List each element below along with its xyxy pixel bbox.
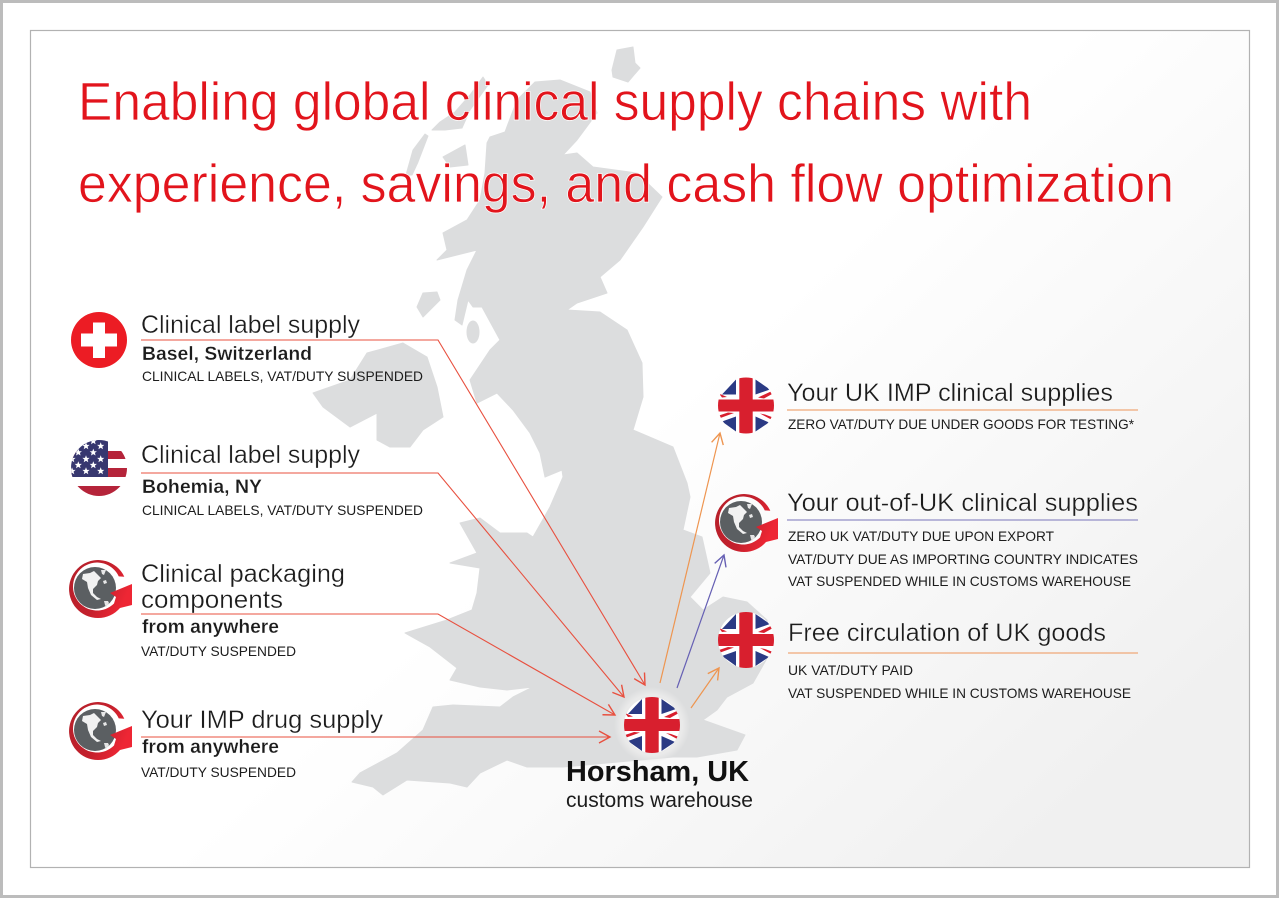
- arrow: Basel to Horsham: [141, 340, 645, 685]
- icon: US flag: [71, 440, 127, 496]
- icon: UK flag: [718, 378, 774, 434]
- title: [78, 72, 1174, 214]
- panel: Bohemia clinical label supply: [68, 437, 423, 518]
- location name: Horsham, UK: [566, 756, 749, 788]
- arrow: Horsham to UK IMP supplies: [660, 433, 720, 683]
- location: Basel, Switzerland: [142, 344, 312, 365]
- icon: globe with arrow: [69, 560, 132, 618]
- note: ZERO VAT/DUTY DUE UNDER GOODS FOR TESTING*: [788, 416, 1135, 432]
- panel: free circulation of UK goods: [718, 612, 1138, 701]
- note: CLINICAL LABELS, VAT/DUTY SUSPENDED: [142, 368, 423, 384]
- subtitle: customs warehouse: [566, 789, 753, 812]
- heading: [141, 560, 345, 614]
- notes: [788, 528, 1138, 589]
- panel: clinical packaging components: [69, 560, 345, 659]
- heading: Your UK IMP clinical supplies: [787, 379, 1113, 407]
- heading: components: [141, 586, 283, 614]
- heading: Your out-of-UK clinical supplies: [787, 489, 1138, 517]
- note: CLINICAL LABELS, VAT/DUTY SUSPENDED: [142, 502, 423, 518]
- icon: UK flag with halo: [614, 687, 690, 763]
- notes: UK VAT/DUTY PAID: [788, 662, 913, 678]
- panel: Basel clinical label supply: [71, 311, 423, 384]
- location: from anywhere: [142, 737, 279, 758]
- panel: your IMP drug supply: [69, 702, 383, 780]
- notes: VAT SUSPENDED WHILE IN CUSTOMS WAREHOUSE: [788, 685, 1131, 701]
- panel: your out-of-UK clinical supplies: [715, 489, 1138, 589]
- heading: Clinical label supply: [141, 441, 360, 469]
- map of the UK: [313, 47, 770, 795]
- heading: Clinical label supply: [141, 311, 360, 339]
- heading: Free circulation of UK goods: [788, 619, 1106, 647]
- location: from anywhere: [142, 617, 279, 638]
- notes: VAT/DUTY DUE AS IMPORTING COUNTRY INDICATES: [788, 551, 1138, 567]
- icon: globe with arrow: [69, 702, 132, 760]
- title: experience, savings, and cash flow optimization: [78, 154, 1174, 214]
- arrow: Horsham to UK goods: [691, 668, 719, 708]
- location: Bohemia, NY: [142, 477, 262, 498]
- heading: Your IMP drug supply: [141, 706, 383, 734]
- notes: VAT SUSPENDED WHILE IN CUSTOMS WAREHOUSE: [788, 573, 1131, 589]
- note: VAT/DUTY SUSPENDED: [141, 764, 296, 780]
- icon: globe with arrow: [715, 494, 778, 552]
- arrow: Horsham to out-of-UK supplies: [677, 555, 724, 688]
- arrow: Bohemia to Horsham: [141, 473, 624, 697]
- heading: Clinical packaging: [141, 560, 345, 588]
- notes: [788, 662, 1131, 701]
- panel: your UK IMP clinical supplies: [718, 378, 1138, 434]
- notes: ZERO UK VAT/DUTY DUE UPON EXPORT: [788, 528, 1054, 544]
- icon: Swiss flag: [71, 312, 127, 368]
- note: VAT/DUTY SUSPENDED: [141, 643, 296, 659]
- arrow: IMP drug supply to Horsham: [141, 736, 610, 738]
- arrow: packaging components to Horsham: [141, 614, 615, 715]
- title: Enabling global clinical supply chains with: [78, 72, 1032, 132]
- icon: UK flag: [718, 612, 774, 668]
- panel: Horsham customs warehouse: [566, 687, 753, 812]
